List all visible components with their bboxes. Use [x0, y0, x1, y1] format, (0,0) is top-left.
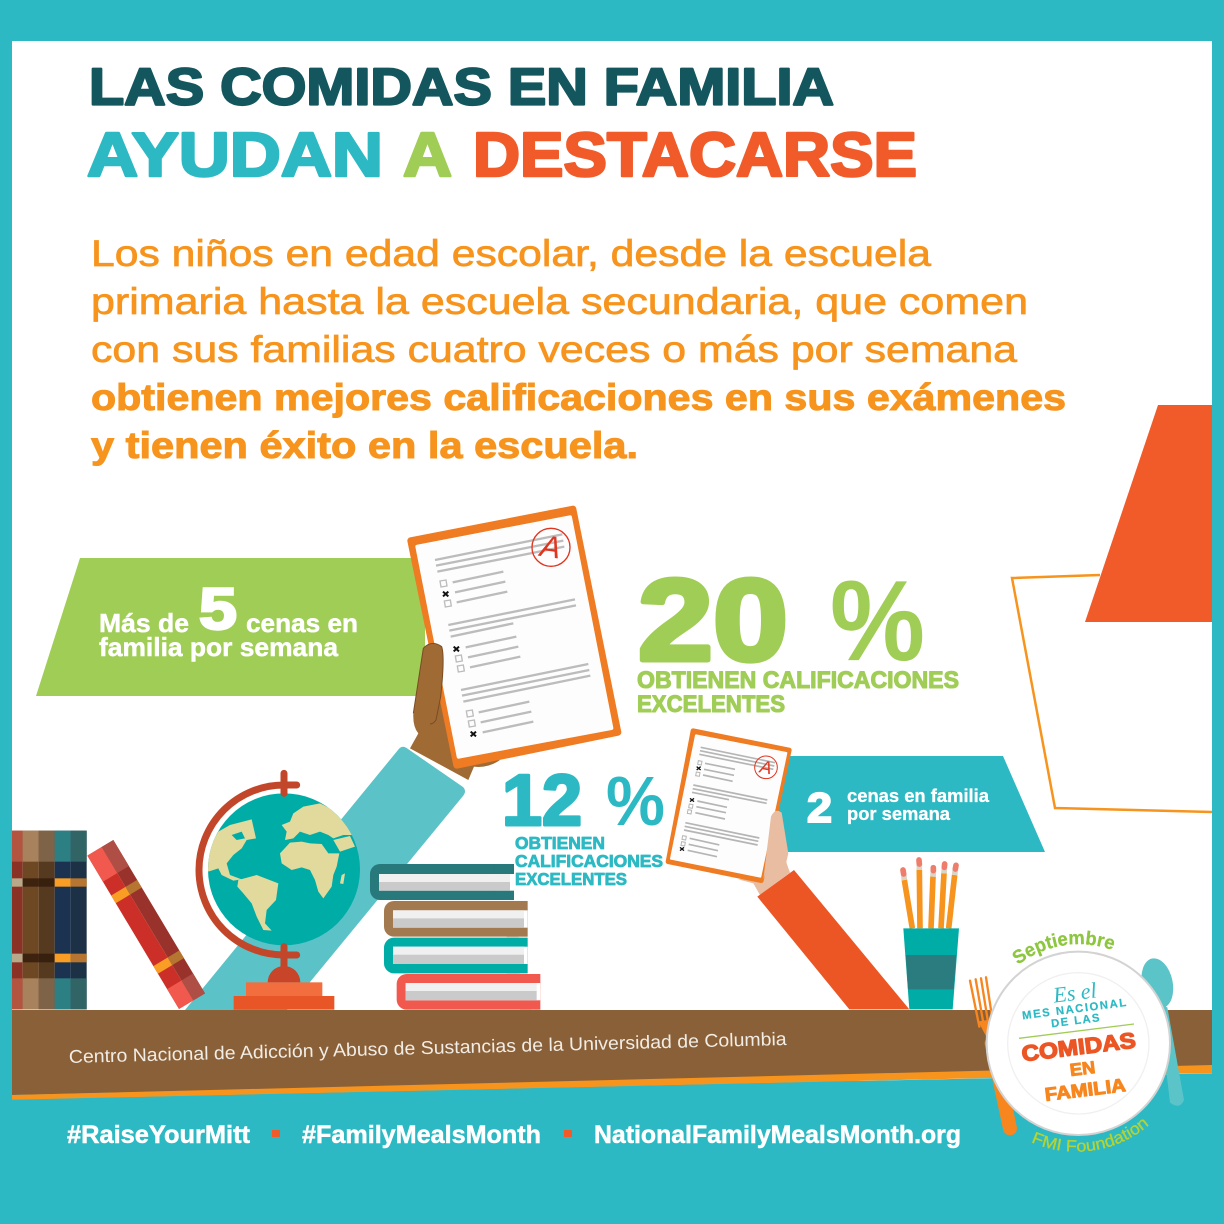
icon: spoon [1137, 955, 1184, 1106]
leaning red book [87, 840, 205, 1009]
title [87, 58, 917, 190]
intro text block [91, 233, 1066, 466]
orange arm, hand and small test paper: A [757, 756, 774, 778]
12 percent statistic: EXCELENTES [515, 869, 627, 889]
curved label: FMI Foundation: FMI Foundation [1032, 1119, 1149, 1152]
12 percent statistic [502, 761, 665, 889]
test paper with A grade and thumb: A [536, 529, 563, 566]
plate text: MES NACIONAL [1022, 997, 1127, 1022]
plate [987, 952, 1170, 1135]
wooden shelf with source line [0, 1000, 1224, 1224]
title: DESTACARSE [473, 121, 917, 190]
wooden shelf with source line: Centro Nacional de Adicción y Abuso de Sustancias de la Universidad de Columbia [69, 1028, 788, 1067]
20 percent statistic: 20 [638, 555, 788, 685]
20 percent statistic: OBTIENEN CALIFICACIONES [637, 667, 959, 694]
intro text block: Los niños en edad escolar, desde la escuela [91, 233, 931, 274]
curved label: Septiembre: Septiembre [1012, 930, 1114, 964]
orange arm, hand and small test paper [668, 731, 909, 1009]
20 percent statistic: EXCELENTES [637, 691, 785, 718]
title: LAS COMIDAS EN FAMILIA [89, 58, 834, 116]
20 percent statistic [637, 555, 959, 718]
hashtags and website footer: NationalFamilyMealsMonth.org [594, 1121, 961, 1149]
teal banner: 2 dinners: por semana [847, 804, 951, 824]
teal banner: 2 dinners: 2 [807, 784, 832, 831]
stack of books [370, 864, 540, 1010]
12 percent statistic: OBTIENEN [515, 833, 605, 853]
intro text block: primaria hasta la escuela secundaria, que comen [91, 281, 1028, 322]
globe on stand [199, 773, 360, 1010]
intro text block: obtienen mejores calificaciones en sus exámenes [91, 377, 1066, 418]
family meals month plate badge [970, 952, 1184, 1135]
decorative orange outline shape [1012, 575, 1212, 812]
intro text block: y tienen éxito en la escuela. [91, 425, 638, 466]
plate text: EN [1069, 1057, 1096, 1080]
plate text: DE LAS [1051, 1012, 1101, 1030]
green banner: more than 5 dinners: cenas en [246, 608, 358, 638]
title: AYUDAN [87, 121, 383, 190]
12 percent statistic: CALIFICACIONES [515, 851, 663, 871]
brown hand palm [410, 660, 500, 780]
plate text: COMIDAS [1020, 1028, 1137, 1066]
20 percent statistic: % [830, 558, 925, 685]
plate text: FAMILIA [1044, 1074, 1127, 1105]
teal banner: 2 dinners: cenas en familia [847, 786, 990, 806]
title: A [403, 121, 452, 190]
decorative orange trapezoid [1085, 405, 1212, 622]
icon: fork [970, 977, 1010, 1128]
12 percent statistic: 12 [502, 761, 582, 841]
hashtags and website footer: #RaiseYourMitt [67, 1121, 251, 1149]
green banner: more than 5 dinners [36, 558, 425, 696]
intro text block: con sus familias cuatro veces o más por semana [91, 329, 1017, 370]
hashtags and website footer: #FamilyMealsMonth [302, 1121, 541, 1149]
hashtags and website footer [67, 1121, 961, 1149]
green banner: more than 5 dinners: 5 [199, 577, 237, 642]
plate text [1019, 977, 1137, 1105]
left upright books [12, 831, 87, 1009]
12 percent statistic: % [606, 762, 665, 840]
teal arm sleeve [185, 747, 465, 1010]
green banner: more than 5 dinners: Más de [99, 608, 189, 638]
test paper with A grade and thumb [411, 509, 618, 765]
plate text: Es el [1051, 977, 1098, 1008]
teal banner: 2 dinners [770, 756, 1045, 852]
pencil cup [903, 860, 959, 1009]
green banner: more than 5 dinners: familia por semana [99, 632, 339, 662]
